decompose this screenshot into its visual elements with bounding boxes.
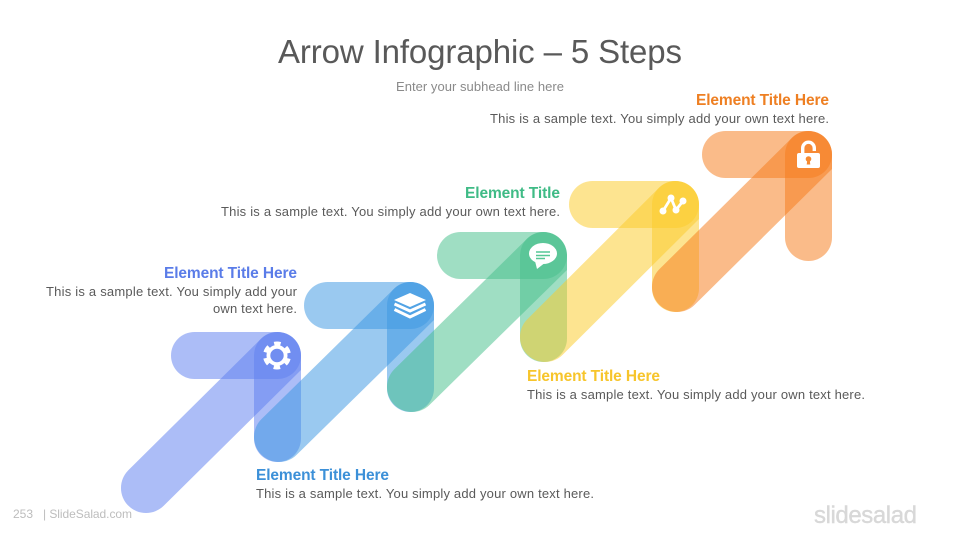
footer: page number and site: 253	[13, 507, 33, 521]
text block: step 3: This is a sample text. You simply add your own text here.	[221, 204, 560, 219]
arrow 1: blue-violet	[121, 332, 301, 513]
subhead: Enter your subhead line here	[396, 79, 564, 94]
arrow 4: yellow	[520, 181, 699, 362]
text block: step 1	[46, 265, 298, 316]
title: Arrow Infographic – 5 Steps	[278, 33, 682, 70]
text block: step 4: Element Title Here	[527, 368, 660, 385]
text block: step 5: Element Title Here	[696, 92, 829, 109]
text block: step 5: This is a sample text. You simply add your own text here.	[490, 111, 829, 126]
text block: step 4	[527, 368, 865, 402]
logo: slidesalad: slidesalad	[814, 502, 917, 529]
arrow 5: orange	[652, 131, 832, 312]
text block: step 3	[221, 185, 560, 219]
text block: step 2: This is a sample text. You simply add your own text here.	[256, 486, 594, 501]
icon: speech bubble	[529, 243, 557, 269]
footer: page number and site: | SlideSalad.com	[43, 507, 132, 521]
text block: step 1: own text here.	[213, 301, 297, 316]
arrow 3: green	[387, 232, 567, 412]
text block: step 5	[490, 92, 829, 126]
text block: step 4: This is a sample text. You simply add your own text here.	[527, 387, 865, 402]
text block: step 1: This is a sample text. You simply add your	[46, 284, 298, 299]
icon: layers	[394, 293, 426, 317]
text block: step 3: Element Title	[465, 185, 560, 202]
arrow 2: blue	[254, 282, 434, 462]
icon: lock	[797, 142, 820, 168]
icon: line nodes	[660, 194, 686, 214]
icon: gear	[265, 344, 289, 368]
text block: step 2	[256, 467, 594, 501]
text block: step 2: Element Title Here	[256, 467, 389, 484]
text block: step 1: Element Title Here	[164, 265, 297, 282]
